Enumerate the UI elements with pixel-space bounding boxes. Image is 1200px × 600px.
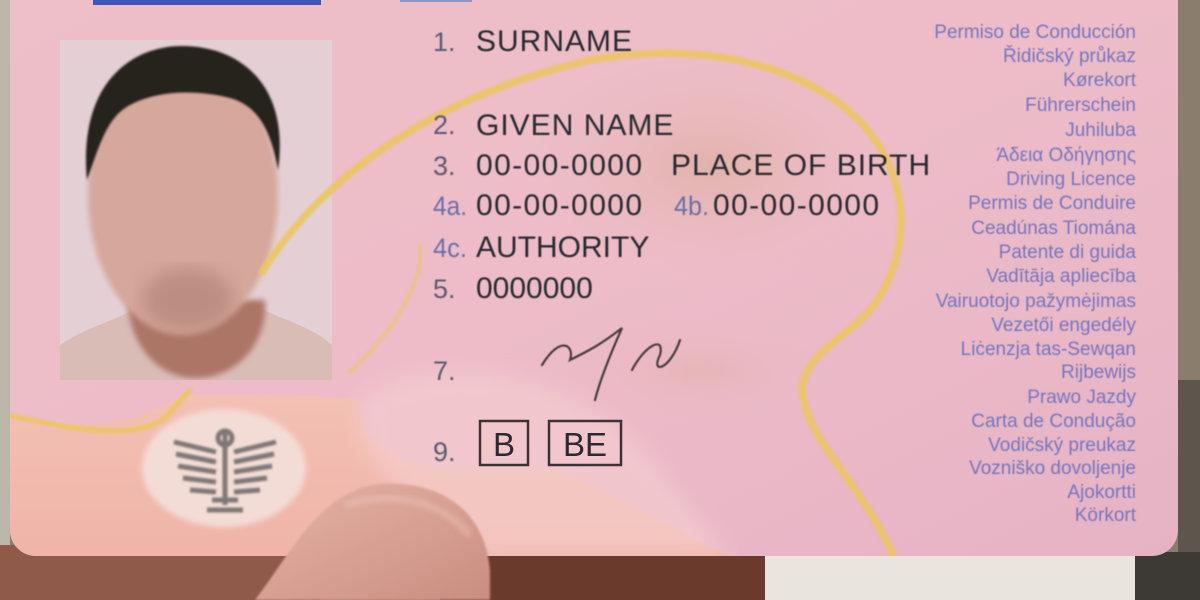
hologram seal <box>142 409 306 527</box>
multilingual licence title column: Körkort <box>1075 505 1137 526</box>
multilingual licence title column: Vozniško dovoljenje <box>969 458 1136 479</box>
multilingual licence title column: Permiso de Conducción <box>934 22 1136 43</box>
field labels: 5. <box>433 274 456 304</box>
multilingual licence title column: Řidičský průkaz <box>1003 45 1136 67</box>
placeholder shoulders <box>60 305 332 380</box>
placeholder lower-face shade <box>142 268 234 332</box>
field values (placeholders): PLACE OF BIRTH <box>671 149 931 182</box>
multilingual licence title column: Άδεια Οδήγησης <box>996 145 1136 166</box>
field labels: 4b. <box>674 191 709 221</box>
multilingual licence title column: Vairuotojo pažymėjimas <box>936 291 1136 312</box>
multilingual licence title column: Vezetői engedély <box>991 315 1136 336</box>
field values (placeholders): SURNAME <box>476 25 633 58</box>
multilingual licence title column: Ceadúnas Tiomána <box>971 218 1136 239</box>
multilingual licence title column: Driving Licence <box>1006 169 1136 190</box>
field labels: 4c. <box>433 233 467 263</box>
warm sheen by signature <box>661 355 740 386</box>
multilingual licence title column: Kørekort <box>1063 70 1137 91</box>
multilingual licence title column: Carta de Condução <box>971 411 1136 432</box>
top edge strip: blue band <box>93 0 321 5</box>
multilingual licence title column: Prawo Jazdy <box>1027 387 1136 408</box>
field labels: 7. <box>433 356 456 386</box>
thumb holding the card <box>255 484 490 600</box>
field labels: 4a. <box>433 191 467 221</box>
field labels: 9. <box>433 437 456 467</box>
field values (placeholders) <box>476 25 931 305</box>
category BE <box>549 421 621 465</box>
multilingual licence title column: Führerschein <box>1025 95 1136 116</box>
warm central glow <box>612 105 808 224</box>
pale lower-centre sheen <box>359 371 730 556</box>
multilingual licence title column: Permis de Conduire <box>968 193 1136 214</box>
seal emblem <box>174 431 276 510</box>
field values (placeholders): 0000000 <box>476 272 593 305</box>
field values (placeholders): GIVEN NAME <box>476 109 674 142</box>
placeholder head <box>88 55 278 335</box>
field values (placeholders): 00-00-0000 <box>713 189 880 222</box>
multilingual licence title column: Vadītāja apliecība <box>986 266 1136 287</box>
multilingual licence title column <box>934 22 1137 526</box>
field labels: 3. <box>433 151 456 181</box>
multilingual licence title column: Ajokortti <box>1067 482 1136 503</box>
thumbnail crease <box>345 498 470 535</box>
field values (placeholders): 00-00-0000 <box>476 189 643 222</box>
signature placeholder <box>542 328 680 400</box>
category B: B <box>493 426 515 463</box>
yellow security swirl <box>12 53 901 555</box>
placeholder hair <box>86 46 280 180</box>
field labels <box>433 27 709 467</box>
multilingual licence title column: Juhiluba <box>1065 120 1136 141</box>
field values (placeholders): AUTHORITY <box>476 231 649 264</box>
multilingual licence title column: Vodičský preukaz <box>988 435 1136 456</box>
photo placeholder <box>60 40 332 380</box>
peach lower-left area <box>10 395 730 556</box>
multilingual licence title column: Rijbewijs <box>1061 362 1136 383</box>
field labels: 2. <box>433 110 456 140</box>
multilingual licence title column: Patente di guida <box>999 242 1136 263</box>
top edge strip: grey-blue band <box>400 0 472 2</box>
category B <box>480 421 528 465</box>
licence categories <box>480 421 621 465</box>
field values (placeholders): 00-00-0000 <box>476 149 643 182</box>
placeholder neck <box>128 300 265 378</box>
multilingual licence title column: Liċenzja tas-Sewqan <box>961 339 1136 360</box>
field labels: 1. <box>433 27 456 57</box>
category BE: BE <box>563 426 607 463</box>
